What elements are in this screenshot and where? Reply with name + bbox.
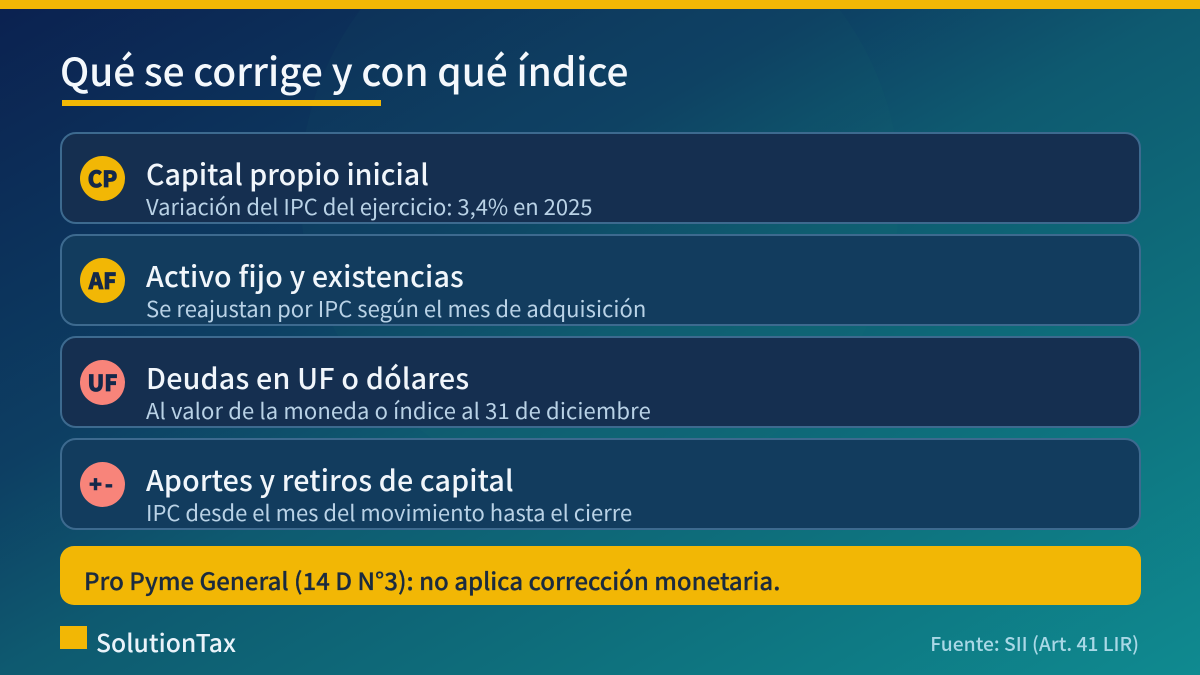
top accent bar [0, 0, 1200, 9]
brand name: SolutionTax [96, 624, 236, 660]
panel: aportes y retiros [60, 438, 1141, 530]
logo square [60, 626, 87, 649]
text: activo fijo detail: Se reajustan por IPC según el mes de adquisición [146, 292, 646, 324]
text: capital propio detail: Variación del IPC del ejercicio: 3,4% en 2025 [146, 190, 592, 222]
icon: UF badge [80, 360, 125, 405]
background glow ellipse [300, 0, 900, 490]
title underline [62, 100, 381, 106]
heading: activo fijo: Activo fijo y existencias [146, 255, 464, 296]
title: Qué se corrige y con qué índice [60, 42, 628, 98]
icon: AF badge [80, 258, 125, 303]
icon: AF badge: AF [89, 264, 116, 296]
icon: CP badge: CP [88, 162, 117, 194]
icon: +- badge: +- [89, 469, 116, 499]
panel: activo fijo [60, 234, 1141, 326]
heading: deudas: Deudas en UF o dólares [146, 357, 469, 398]
panel: deudas [60, 336, 1141, 428]
source note: Fuente: SII (Art. 41 LIR) [930, 629, 1139, 657]
callout: pro pyme [60, 546, 1141, 605]
panel: capital propio inicial [60, 132, 1141, 224]
heading: capital propio: Capital propio inicial [146, 153, 429, 194]
icon: UF badge: UF [87, 366, 118, 398]
callout text: Pro Pyme General (14 D N°3): no aplica corrección monetaria. [84, 562, 780, 597]
icon: +- badge [80, 462, 125, 507]
text: aportes detail: IPC desde el mes del movimiento hasta el cierre [146, 496, 632, 528]
icon: CP badge [80, 156, 125, 201]
text: deudas detail: Al valor de la moneda o índice al 31 de diciembre [146, 394, 651, 426]
heading: aportes: Aportes y retiros de capital [146, 459, 514, 500]
